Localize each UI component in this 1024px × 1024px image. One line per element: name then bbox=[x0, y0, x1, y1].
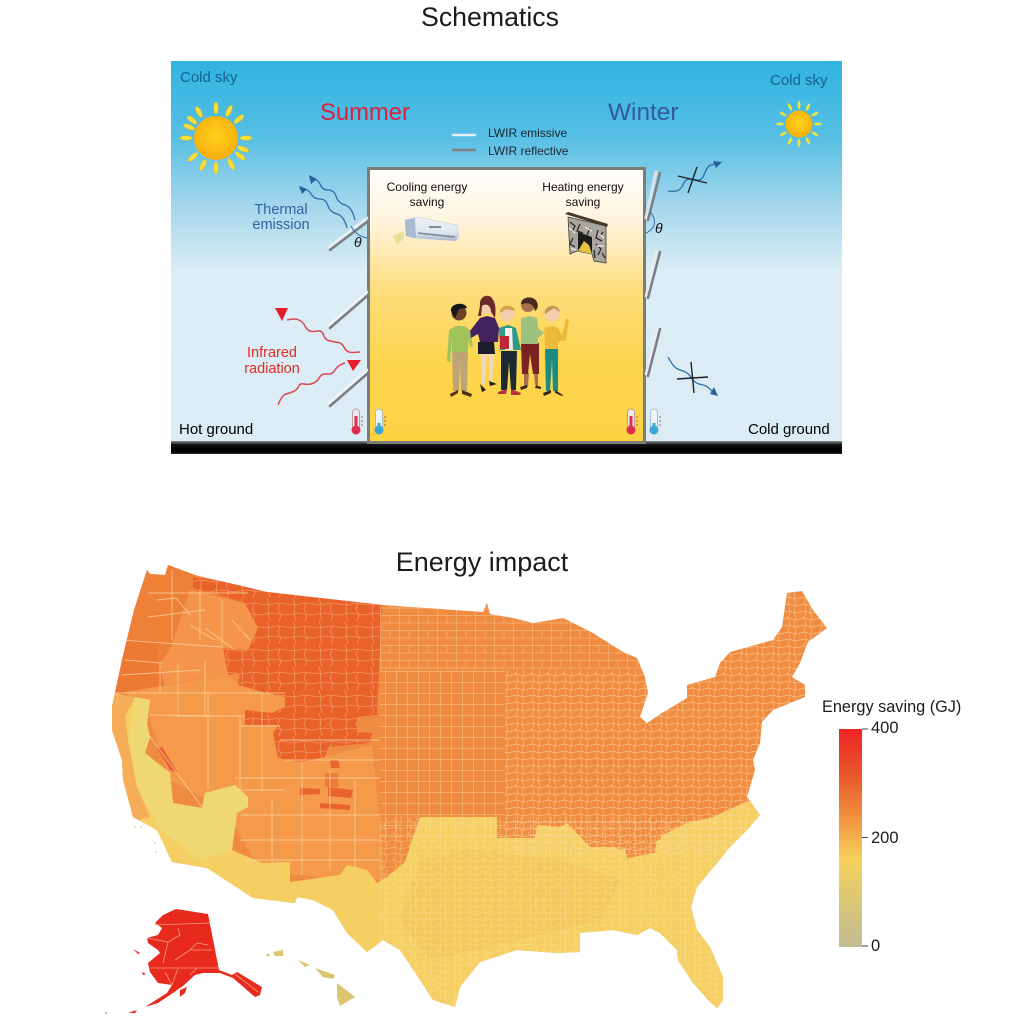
thermometer: left blue bbox=[374, 409, 386, 434]
label: tilt angle left bbox=[351, 226, 367, 250]
legend title: Energy saving (GJ) bbox=[822, 698, 961, 716]
tick label 200: 200 bbox=[871, 829, 899, 847]
label: tilt angle left: θ bbox=[354, 234, 362, 250]
arrow: thermal emission waves bbox=[299, 175, 355, 228]
heading: Summer: Summer bbox=[320, 99, 410, 126]
map inset: Hawaii bbox=[266, 950, 355, 1006]
label: cold sky right: Cold sky bbox=[770, 72, 828, 89]
legend: LWIR coatings: LWIR emissive bbox=[488, 126, 567, 140]
colour ramp bbox=[839, 729, 862, 947]
room bbox=[368, 168, 644, 442]
person 1 bbox=[447, 304, 473, 397]
arrow: blocked upper winter wave bbox=[668, 161, 722, 193]
arrow: blocked lower winter wave bbox=[668, 357, 718, 396]
person 2 bbox=[470, 296, 499, 392]
icon: winter sun bbox=[776, 101, 822, 147]
person 5 bbox=[543, 306, 569, 396]
label: cold sky left: Cold sky bbox=[180, 69, 238, 86]
panel: schematic scene bbox=[171, 61, 842, 454]
icon: summer sun bbox=[180, 102, 252, 174]
map inset: Alaska bbox=[105, 909, 262, 1014]
thermometer: right red bbox=[626, 409, 638, 434]
title: Schematics: Schematics bbox=[421, 2, 559, 32]
text: cooling energy saving: Cooling energy bbox=[387, 180, 467, 194]
text: heating energy saving: saving bbox=[566, 195, 600, 209]
county lines: western states bbox=[115, 570, 380, 880]
label: cold ground: Cold ground bbox=[748, 421, 830, 438]
text: thermal emission: emission bbox=[252, 217, 310, 233]
icon: fireplace bbox=[565, 212, 608, 263]
tick label 0: 0 bbox=[871, 937, 880, 955]
text: infrared radiation: radiation bbox=[244, 361, 300, 377]
text: cooling energy saving: saving bbox=[410, 195, 444, 209]
group of people bbox=[447, 296, 569, 397]
map inset: California islands bbox=[134, 826, 157, 853]
icon: right louvers bbox=[646, 172, 660, 376]
label: hot ground: Hot ground bbox=[179, 421, 253, 438]
icon: air conditioner bbox=[393, 217, 459, 245]
person 3 bbox=[498, 306, 521, 395]
person 4 bbox=[520, 297, 544, 390]
tick marks bbox=[862, 729, 868, 946]
text: heating energy saving: Heating energy bbox=[542, 180, 624, 194]
icon: left louvers bbox=[329, 218, 367, 406]
thermometer: left red bbox=[352, 409, 363, 434]
legend: LWIR coatings: LWIR reflective bbox=[488, 144, 569, 158]
text: infrared radiation: Infrared bbox=[247, 345, 297, 361]
thermometer: right blue bbox=[650, 409, 661, 434]
label: tilt angle right bbox=[646, 212, 663, 236]
choropleth map: contiguous United States bbox=[100, 560, 840, 1020]
sky background bbox=[171, 61, 842, 442]
legend: energy saving colour bar bbox=[822, 698, 961, 955]
label: tilt angle right: θ bbox=[655, 220, 663, 236]
ground bar bbox=[171, 441, 842, 454]
heading: Winter: Winter bbox=[608, 99, 678, 126]
legend: LWIR coatings bbox=[452, 126, 569, 158]
tick label 400: 400 bbox=[871, 719, 899, 737]
title: Energy impact: Energy impact bbox=[396, 547, 569, 577]
text: thermal emission: Thermal bbox=[254, 202, 308, 218]
arrow: infrared radiation waves bbox=[275, 308, 361, 405]
